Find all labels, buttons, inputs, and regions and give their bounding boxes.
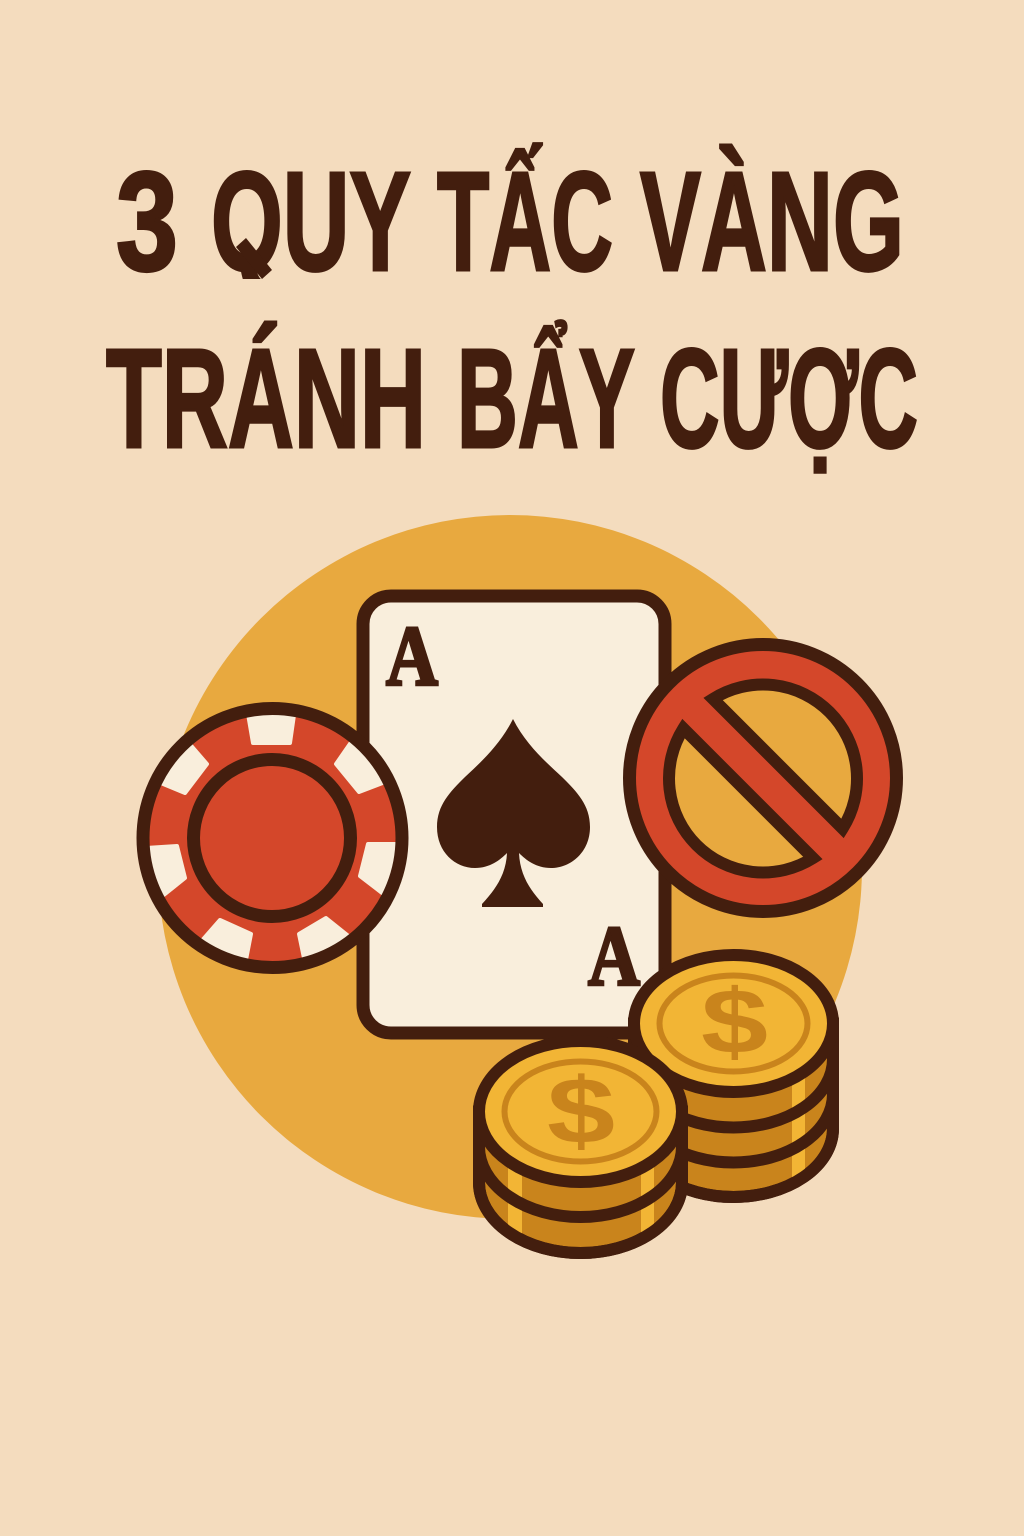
icon: playing card: A <box>386 608 438 704</box>
icon: left coin stack <box>479 1041 682 1253</box>
title: TRÁNH <box>106 319 426 477</box>
title: BẨY <box>457 319 635 477</box>
icon: right coin stack: $ <box>701 971 768 1073</box>
background circle <box>158 515 862 1219</box>
title: TẤC <box>437 142 613 300</box>
icon: left coin stack: $ <box>547 1058 615 1163</box>
icon: spade <box>437 719 590 907</box>
title <box>106 142 918 477</box>
icon: right coin stack <box>634 955 833 1197</box>
icon: poker chip <box>143 708 402 968</box>
title: 3 <box>116 142 178 300</box>
icon: playing card: A <box>588 908 640 1004</box>
icon: prohibition sign <box>630 644 896 912</box>
icon: playing card <box>363 596 665 1033</box>
title: QUY <box>211 142 411 300</box>
